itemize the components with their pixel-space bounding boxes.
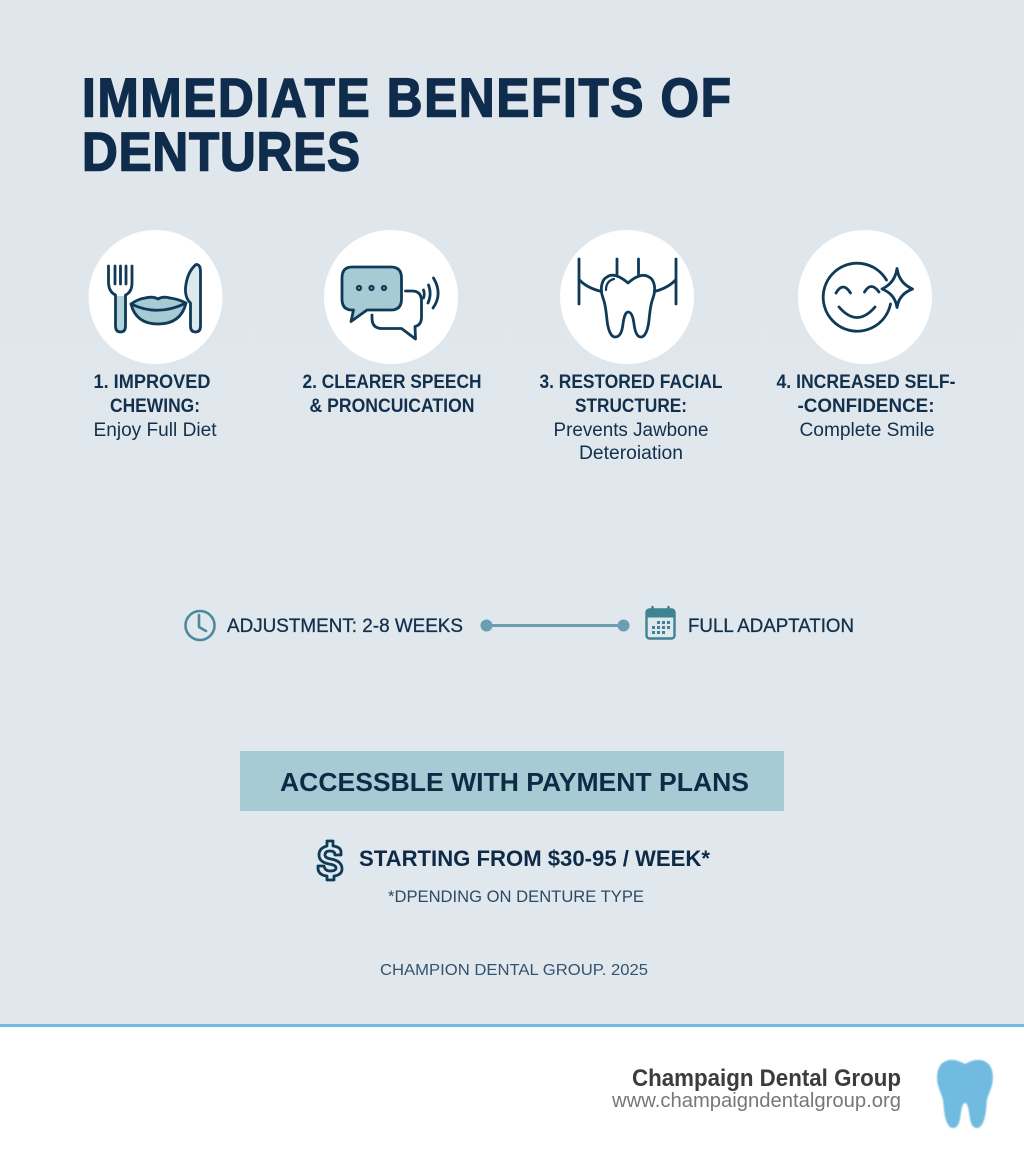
footer brand [611, 1060, 993, 1128]
payment banner: ACCESSBLE WITH PAYMENT PLANS [280, 769, 749, 797]
label: clearer speech: 2. CLEARER SPEECH [302, 372, 482, 393]
panel: clearer speech [302, 230, 482, 417]
title: IMMEDIATE BENEFITS OF [82, 68, 731, 129]
footnote: *DPENDING ON DENTURE TYPE [388, 887, 644, 906]
label: restored facial structure [540, 372, 723, 464]
icon: dollar sign [318, 841, 342, 880]
full adaptation label: FULL ADAPTATION [688, 616, 854, 637]
label: restored facial structure: Prevents Jawbone [554, 420, 708, 441]
brand name: Champaign Dental Group [632, 1065, 901, 1092]
icon: clock [186, 611, 214, 640]
label: increased self-confidence: Complete Smile [800, 420, 934, 441]
label: increased self-confidence: 4. INCREASED SELF- [776, 372, 956, 393]
label: improved chewing [94, 372, 217, 441]
label: increased self-confidence: -CONFIDENCE: [798, 396, 934, 417]
label: increased self-confidence [776, 372, 956, 441]
payment banner [240, 751, 784, 811]
label: restored facial structure: 3. RESTORED FACIAL [540, 372, 723, 393]
label: clearer speech: & PRONCUICATION [310, 396, 474, 417]
icon: smiling face with sparkle [798, 230, 932, 364]
title: DENTURES [82, 122, 360, 183]
panel: improved chewing [88, 230, 222, 441]
title [82, 68, 731, 183]
price text: STARTING FROM $30-95 / WEEK* [359, 846, 710, 871]
timeline connector [480, 620, 630, 632]
label: restored facial structure: STRUCTURE: [575, 396, 687, 417]
label: restored facial structure: Deteroiation [579, 443, 683, 464]
label: improved chewing: 1. IMPROVED [94, 372, 210, 393]
website: www.champaigndentalgroup.org [611, 1090, 901, 1112]
panel: restored facial structure [540, 230, 723, 464]
icon: tooth logo [937, 1060, 993, 1128]
credit line: CHAMPION DENTAL GROUP. 2025 [380, 962, 648, 979]
icon: fork, lips and knife [88, 230, 222, 364]
label: improved chewing: Enjoy Full Diet [94, 420, 217, 441]
timeline [186, 607, 854, 640]
pricing [318, 841, 710, 906]
adjustment label: ADJUSTMENT: 2-8 WEEKS [227, 616, 463, 637]
icon: speech bubbles [324, 230, 458, 364]
label: clearer speech [302, 372, 482, 417]
label: improved chewing: CHEWING: [110, 396, 200, 417]
icon: calendar [646, 607, 674, 638]
icon: tooth with jaw lines [560, 230, 694, 364]
panel: increased self-confidence [776, 230, 956, 441]
